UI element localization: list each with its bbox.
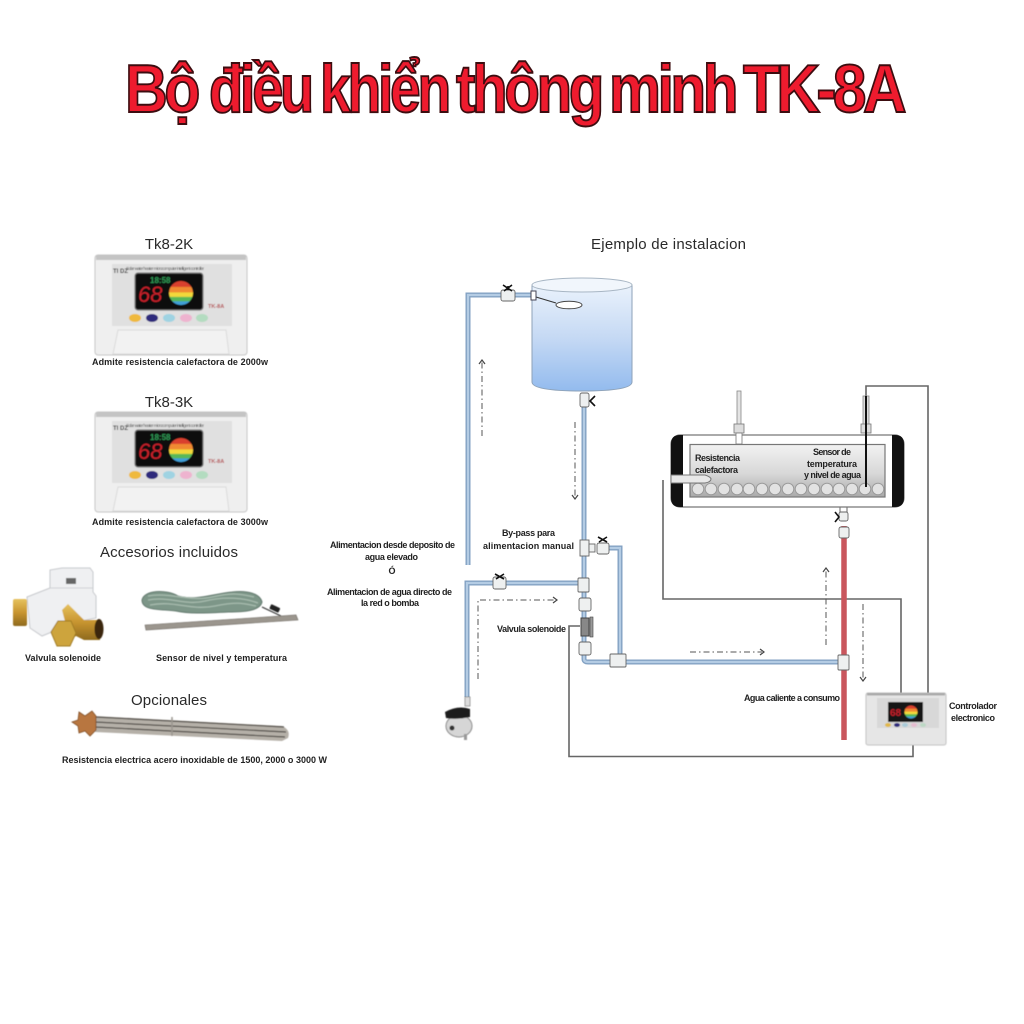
- controller photo 2K: Solar water heater microcomputer intelligent controller: [126, 266, 204, 271]
- label: or: Ó: [388, 565, 396, 576]
- label: controller line 2: electronico: [951, 713, 996, 723]
- arrow: riser up: [479, 360, 485, 436]
- feed tee: [578, 578, 589, 592]
- bottom tee: [610, 654, 626, 667]
- flow arrows: [478, 360, 866, 681]
- diagram heading: Ejemplo de instalacion: [591, 236, 746, 253]
- label: mains feed line 2: la red o bomba: [361, 598, 420, 608]
- bypass tee and valve: [580, 537, 609, 556]
- controller photo 3K: TK-8A: [208, 459, 224, 465]
- labels: [327, 528, 997, 723]
- hot water pipe: [841, 526, 847, 740]
- arrow: to collector: [690, 649, 764, 655]
- caption 3000w: Admite resistencia calefactora de 3000w: [92, 517, 269, 527]
- controller photo 2K: 68: [138, 282, 163, 307]
- valves and fittings: [493, 285, 849, 670]
- title: điều: [209, 51, 311, 127]
- arrow: up to collector: [823, 568, 829, 645]
- cold water pipes: [467, 295, 840, 697]
- caption 2000w: Admite resistencia calefactora de 2000w: [92, 357, 269, 367]
- controller photo 3K: 18:58: [150, 433, 171, 442]
- icon: electric heating element: [72, 711, 289, 741]
- panel: included accessories: [13, 544, 298, 663]
- solar collector: [671, 391, 904, 507]
- title: minh: [609, 51, 735, 127]
- heating element in collector: [671, 475, 711, 483]
- controller photo 3K: TI DZ: [113, 426, 128, 432]
- panel: model Tk8-2K: [92, 236, 269, 367]
- mini controller: [866, 693, 946, 745]
- label: heating element: Resistencia: [695, 453, 741, 463]
- heading: accessories: Accesorios incluidos: [100, 544, 238, 561]
- title: thông: [456, 51, 601, 127]
- label: bypass line 2: alimentacion manual: [483, 541, 574, 551]
- panel: model Tk8-3K: [92, 394, 269, 527]
- controller photo 2K: TK-8A: [208, 304, 224, 310]
- panel: installation diagram: [327, 236, 997, 756]
- label: controller: Controlador: [949, 701, 997, 711]
- title: khiển: [320, 51, 448, 127]
- unions and solenoid: [579, 598, 593, 655]
- label: sensor line 2: temperatura: [807, 459, 858, 469]
- label: mains feed: Alimentacion de agua directo de: [327, 587, 452, 597]
- heading: Tk8-2K: Tk8-2K: [145, 236, 193, 253]
- mini controller: 68: [890, 708, 902, 719]
- label: feed source line 2: agua elevado: [365, 552, 418, 562]
- icon: level and temperature sensor: [142, 591, 298, 630]
- label: heating element line 2: calefactora: [695, 465, 739, 475]
- arrow: tank down: [572, 422, 578, 499]
- pump: [445, 697, 472, 740]
- panel: optional parts: [62, 692, 328, 765]
- heading: optional: Opcionales: [131, 692, 207, 709]
- controller photo 2K: [95, 255, 247, 355]
- collector left port: [734, 391, 744, 444]
- valve: feed line: [493, 574, 506, 589]
- arrow: feed: [478, 597, 557, 679]
- storage tank: [531, 278, 632, 391]
- collector outlet fittings: [835, 507, 849, 538]
- valve: tank outlet: [580, 393, 595, 407]
- icon: solenoid valve: [13, 568, 104, 646]
- caption: solenoid valve: Valvula solenoide: [25, 653, 101, 663]
- wiring: [569, 386, 928, 756]
- title: Bộ: [125, 51, 198, 127]
- controller photo 3K: [95, 412, 247, 512]
- caption: sensor: Sensor de nivel y temperatura: [156, 653, 288, 663]
- controller photo 2K: 18:58: [150, 276, 171, 285]
- controller photo 3K: Solar water heater microcomputer intelligent controller: [126, 423, 204, 428]
- collector sensor port: [861, 396, 871, 487]
- caption: heating element: Resistencia electrica acero inoxidable de 1500, 2000 o 3000 W: [62, 755, 328, 765]
- vacuum tubes: [692, 483, 884, 495]
- label: sensor line 3: y nivel de agua: [804, 470, 862, 480]
- title: [125, 51, 906, 127]
- label: sensor: Sensor de: [813, 447, 851, 457]
- controller photo 2K: TI DZ: [113, 269, 128, 275]
- label: hot water: Agua caliente a consumo: [744, 693, 840, 703]
- label: feed source: Alimentacion desde deposito de: [330, 540, 455, 550]
- hot outlet tee: [838, 655, 849, 670]
- label: solenoid valve: Valvula solenoide: [497, 624, 566, 634]
- label: bypass: By-pass para: [502, 528, 556, 538]
- title: TK-8A: [743, 51, 906, 127]
- arrow: hot down: [860, 604, 866, 681]
- valve: tank inlet: [501, 285, 515, 301]
- controller photo 3K: 68: [138, 439, 163, 464]
- heading: Tk8-3K: Tk8-3K: [145, 394, 193, 411]
